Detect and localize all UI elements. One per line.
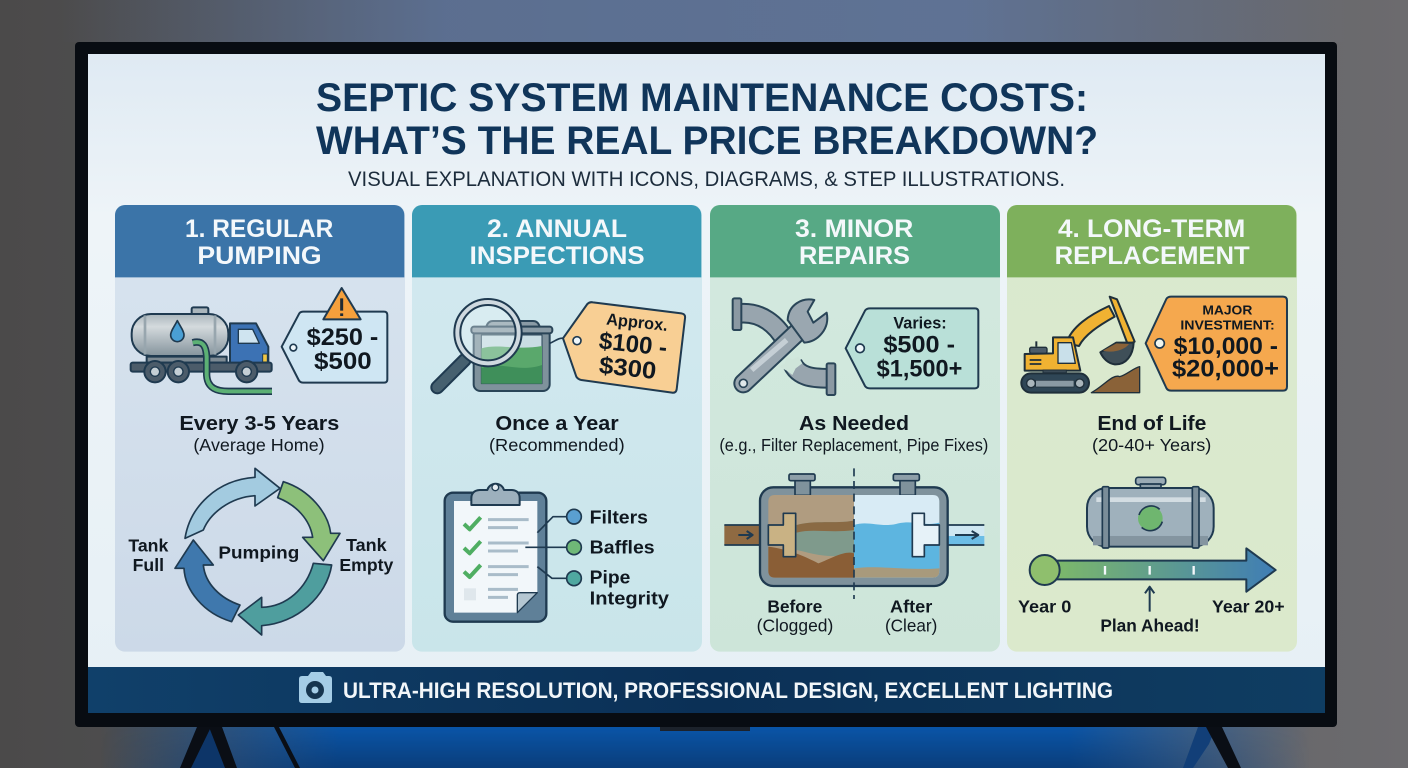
diagram: before and after tank	[724, 468, 984, 599]
timeline labels	[1018, 596, 1285, 636]
header text	[1055, 215, 1250, 270]
diagram labels: After	[890, 596, 932, 616]
panel background	[412, 205, 702, 652]
checklist labels	[590, 506, 670, 608]
title: WHAT’S THE REAL PRICE BREAKDOWN?	[316, 119, 1098, 163]
title: SEPTIC SYSTEM MAINTENANCE COSTS:	[316, 76, 1088, 120]
price tag: MAJOR	[1202, 302, 1253, 317]
header text: 1. REGULAR	[185, 215, 333, 243]
checklist labels: Integrity	[590, 587, 670, 608]
panel header	[1007, 205, 1296, 277]
stand left leg	[180, 727, 300, 768]
banner text: ULTRA-HIGH RESOLUTION, PROFESSIONAL DESIGN, EXCELLENT LIGHTING	[343, 678, 1113, 703]
price tag: Approx.	[605, 310, 669, 335]
cycle labels: Tank	[128, 536, 169, 556]
cycle labels: Full	[133, 555, 164, 575]
panel: 2 annual inspections	[412, 205, 702, 652]
cycle labels: Empty	[339, 555, 393, 575]
price tag	[846, 308, 978, 388]
frequency text: End of Life	[1097, 413, 1206, 435]
header text: 4. LONG-TERM	[1058, 215, 1245, 243]
frequency text	[719, 413, 988, 455]
price tag: INVESTMENT:	[1180, 317, 1275, 332]
diagram labels	[757, 596, 937, 636]
icon: tank	[471, 321, 552, 391]
header text: PUMPING	[197, 242, 322, 270]
price tag: $300	[598, 352, 658, 385]
connectors and dots	[525, 509, 581, 586]
panel header	[115, 205, 404, 277]
frequency text	[179, 413, 339, 455]
panel header	[710, 205, 1000, 277]
panel: 1 regular pumping	[115, 205, 405, 652]
panel background	[1007, 205, 1297, 652]
sensor bar	[660, 727, 750, 731]
header text: REPLACEMENT	[1055, 242, 1250, 270]
icon: magnifier	[437, 302, 519, 387]
frequency text: (Average Home)	[193, 435, 325, 455]
header text: 3. MINOR	[795, 215, 913, 243]
icon: camera	[299, 672, 332, 703]
checklist labels: Baffles	[590, 536, 655, 557]
frequency text: Once a Year	[495, 413, 619, 435]
frequency text	[489, 413, 625, 455]
frequency text: (e.g., Filter Replacement, Pipe Fixes)	[719, 435, 988, 455]
icon: pump truck	[131, 307, 272, 382]
subtitle: VISUAL EXPLANATION WITH ICONS, DIAGRAMS, & STEP ILLUSTRATIONS.	[348, 168, 1065, 191]
timeline labels: Year 0	[1018, 596, 1071, 616]
header text	[470, 215, 645, 270]
icon: replacement tank	[1087, 477, 1214, 548]
title	[316, 76, 1098, 163]
cycle labels	[128, 535, 393, 575]
frequency text: (Recommended)	[489, 435, 625, 455]
checklist labels: Filters	[590, 506, 648, 527]
header text	[795, 215, 913, 270]
timeline arrow	[1030, 548, 1276, 612]
icon: broken pipe and wrench	[733, 298, 835, 395]
stand right leg	[1183, 727, 1241, 768]
price tag: $100 -	[598, 328, 668, 362]
header text	[185, 215, 333, 270]
frequency text: (20-40+ Years)	[1092, 435, 1211, 455]
price tag: $250 -	[307, 324, 378, 351]
cycle labels: Pumping	[218, 542, 299, 562]
tv frame	[75, 42, 1337, 727]
screen	[88, 54, 1325, 713]
cycle labels: Tank	[346, 535, 388, 555]
header text: INSPECTIONS	[470, 242, 645, 270]
icon: clipboard	[445, 484, 546, 622]
price tag: $10,000 -	[1174, 333, 1278, 360]
header text: REPAIRS	[799, 242, 910, 270]
checklist labels: Pipe	[590, 567, 630, 588]
frequency text: As Needed	[799, 413, 909, 435]
diagram labels: (Clear)	[885, 616, 937, 636]
icon: warning	[323, 288, 361, 319]
panel background	[115, 205, 405, 652]
icon: excavator	[1021, 297, 1140, 393]
price tag: Varies:	[893, 313, 947, 332]
panel background	[710, 205, 1000, 652]
panel header	[412, 205, 701, 277]
price tag	[550, 302, 685, 393]
panel: 3 minor repairs	[710, 205, 1000, 652]
price tag: $500	[314, 348, 372, 375]
timeline labels: Plan Ahead!	[1100, 616, 1200, 636]
cycle diagram	[175, 468, 340, 635]
price tag	[282, 288, 387, 383]
frequency text: Every 3-5 Years	[179, 413, 339, 435]
header text: 2. ANNUAL	[487, 215, 627, 243]
icon: hose	[193, 342, 272, 391]
diagram labels: (Clogged)	[757, 616, 833, 636]
price tag: $20,000+	[1172, 356, 1279, 383]
price tag: $1,500+	[877, 356, 962, 383]
price tag: $500 -	[883, 332, 955, 359]
price tag	[1146, 297, 1287, 391]
panel: 4 long-term replacement	[1007, 205, 1297, 652]
footer banner	[88, 667, 1325, 713]
timeline labels: Year 20+	[1212, 596, 1285, 616]
frequency text	[1092, 413, 1211, 455]
diagram labels: Before	[767, 596, 822, 616]
